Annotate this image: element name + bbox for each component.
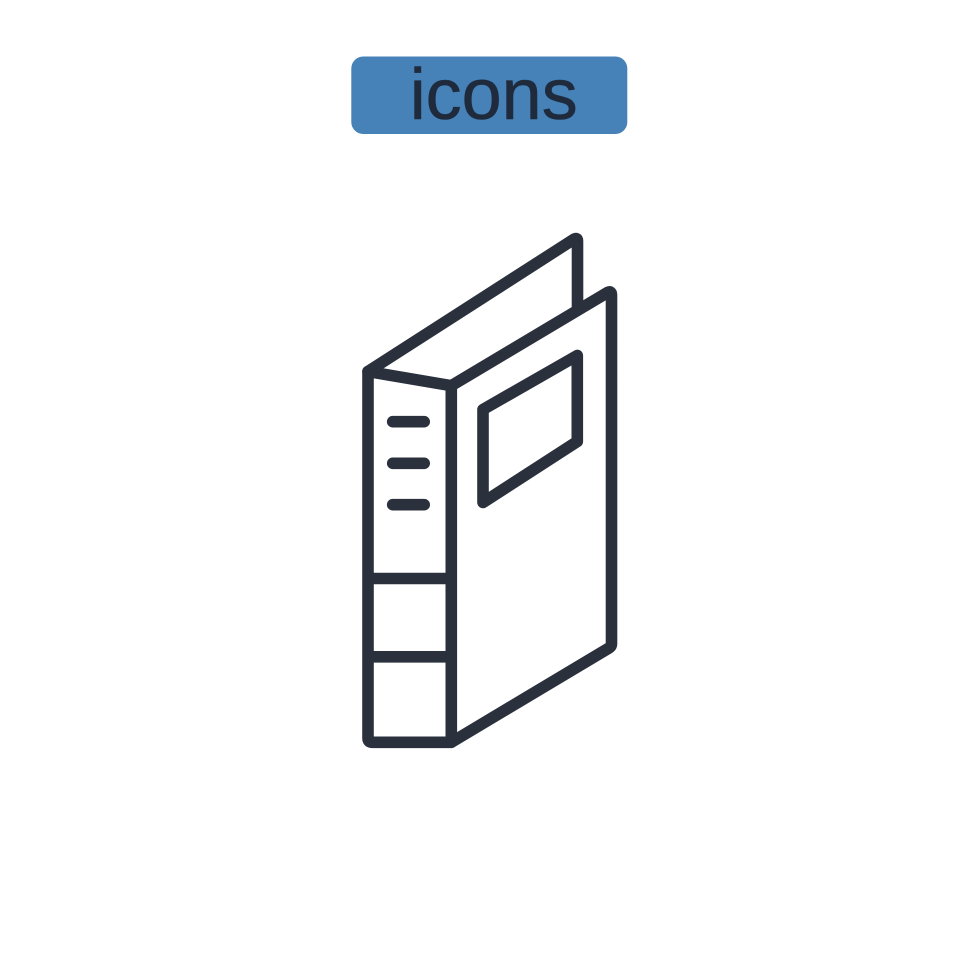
badge: icons heading	[351, 55, 627, 135]
front cover	[451, 292, 612, 742]
spine bands	[368, 578, 451, 657]
badge: icons heading: icons	[410, 55, 578, 135]
spine lines	[393, 422, 424, 505]
book spine	[368, 372, 451, 742]
icon: standing book	[368, 239, 612, 742]
back cover	[368, 239, 578, 372]
cover label	[483, 356, 577, 502]
